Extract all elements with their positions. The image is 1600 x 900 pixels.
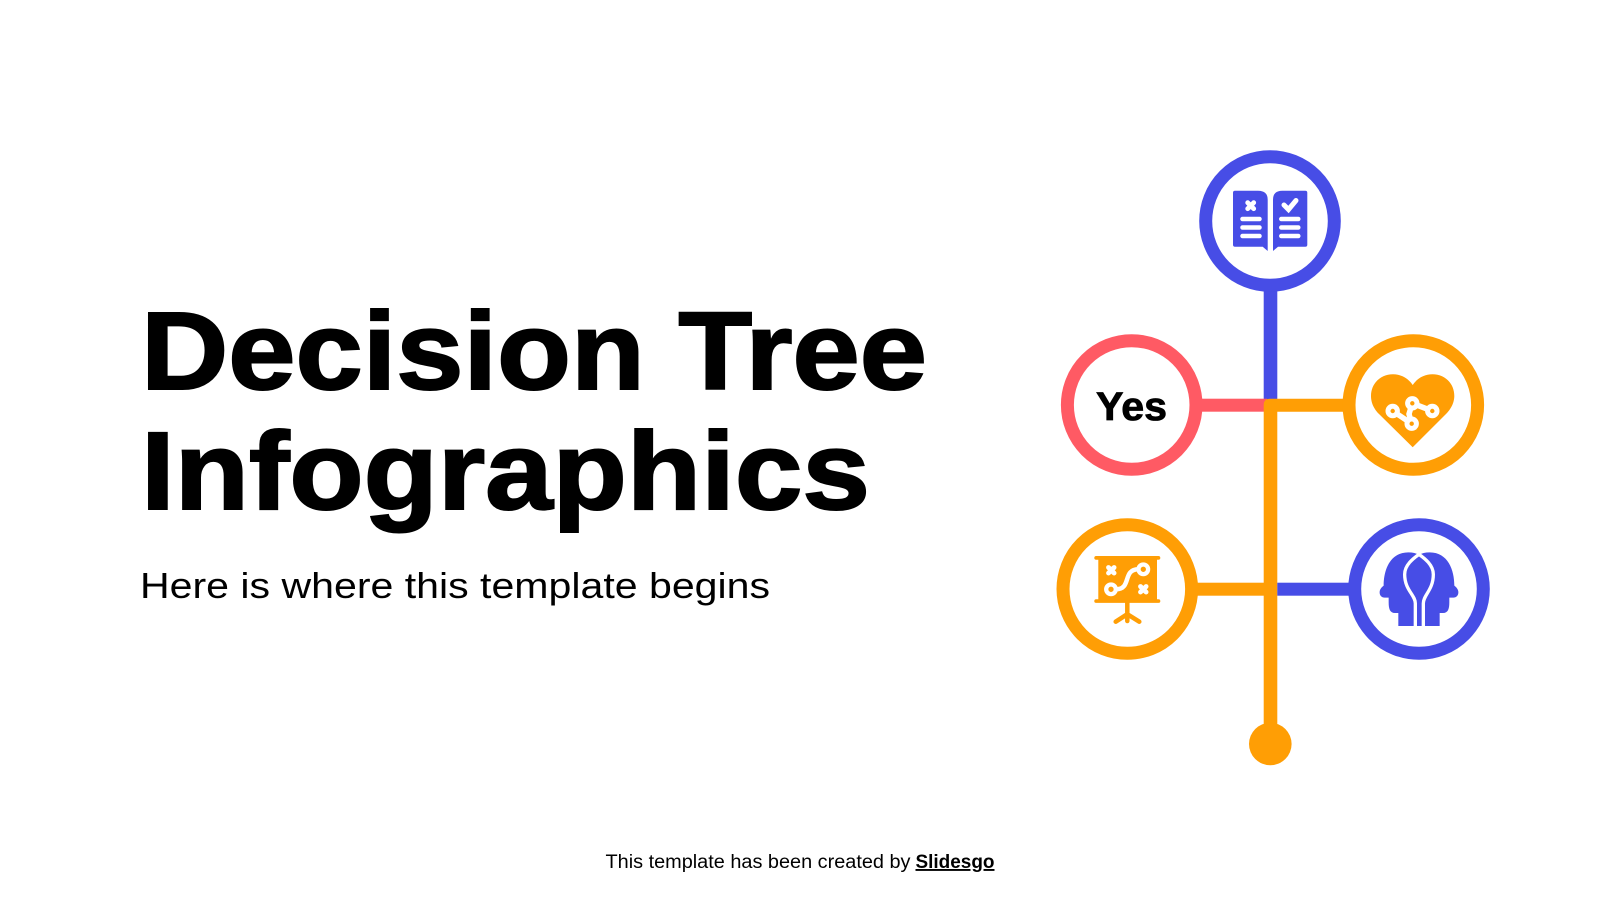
footer credit: This template has been created by: [606, 852, 911, 873]
node: strategy board circle: [1063, 525, 1192, 653]
connector: lower right blue branch: [1277, 583, 1352, 596]
title: Infographics: [141, 410, 870, 533]
connector: top blue stem: [1264, 285, 1277, 407]
node: heart circle: [1349, 341, 1478, 469]
end dot: [1249, 723, 1292, 765]
icon: heart with network nodes: [1371, 374, 1454, 447]
node: top book circle: [1206, 157, 1334, 285]
subtitle: Here is where this template begins: [140, 565, 770, 606]
connector: orange trunk and upper right branch: [1264, 399, 1350, 744]
connector: lower left orange branch: [1190, 583, 1265, 596]
node: two heads circle: [1355, 525, 1483, 653]
connector: red branch to Yes: [1195, 399, 1267, 412]
label: Yes: Yes: [1096, 385, 1167, 429]
icon: presentation board with route: [1094, 556, 1160, 622]
node: Yes circle: [1067, 341, 1196, 469]
title: Decision Tree: [141, 290, 927, 413]
decision tree diagram: [1063, 157, 1483, 765]
title: [141, 290, 927, 533]
footer credit: Slidesgo: [916, 852, 994, 873]
icon: open book with cross and check: [1233, 191, 1307, 251]
icon: two facing heads: [1380, 552, 1458, 626]
